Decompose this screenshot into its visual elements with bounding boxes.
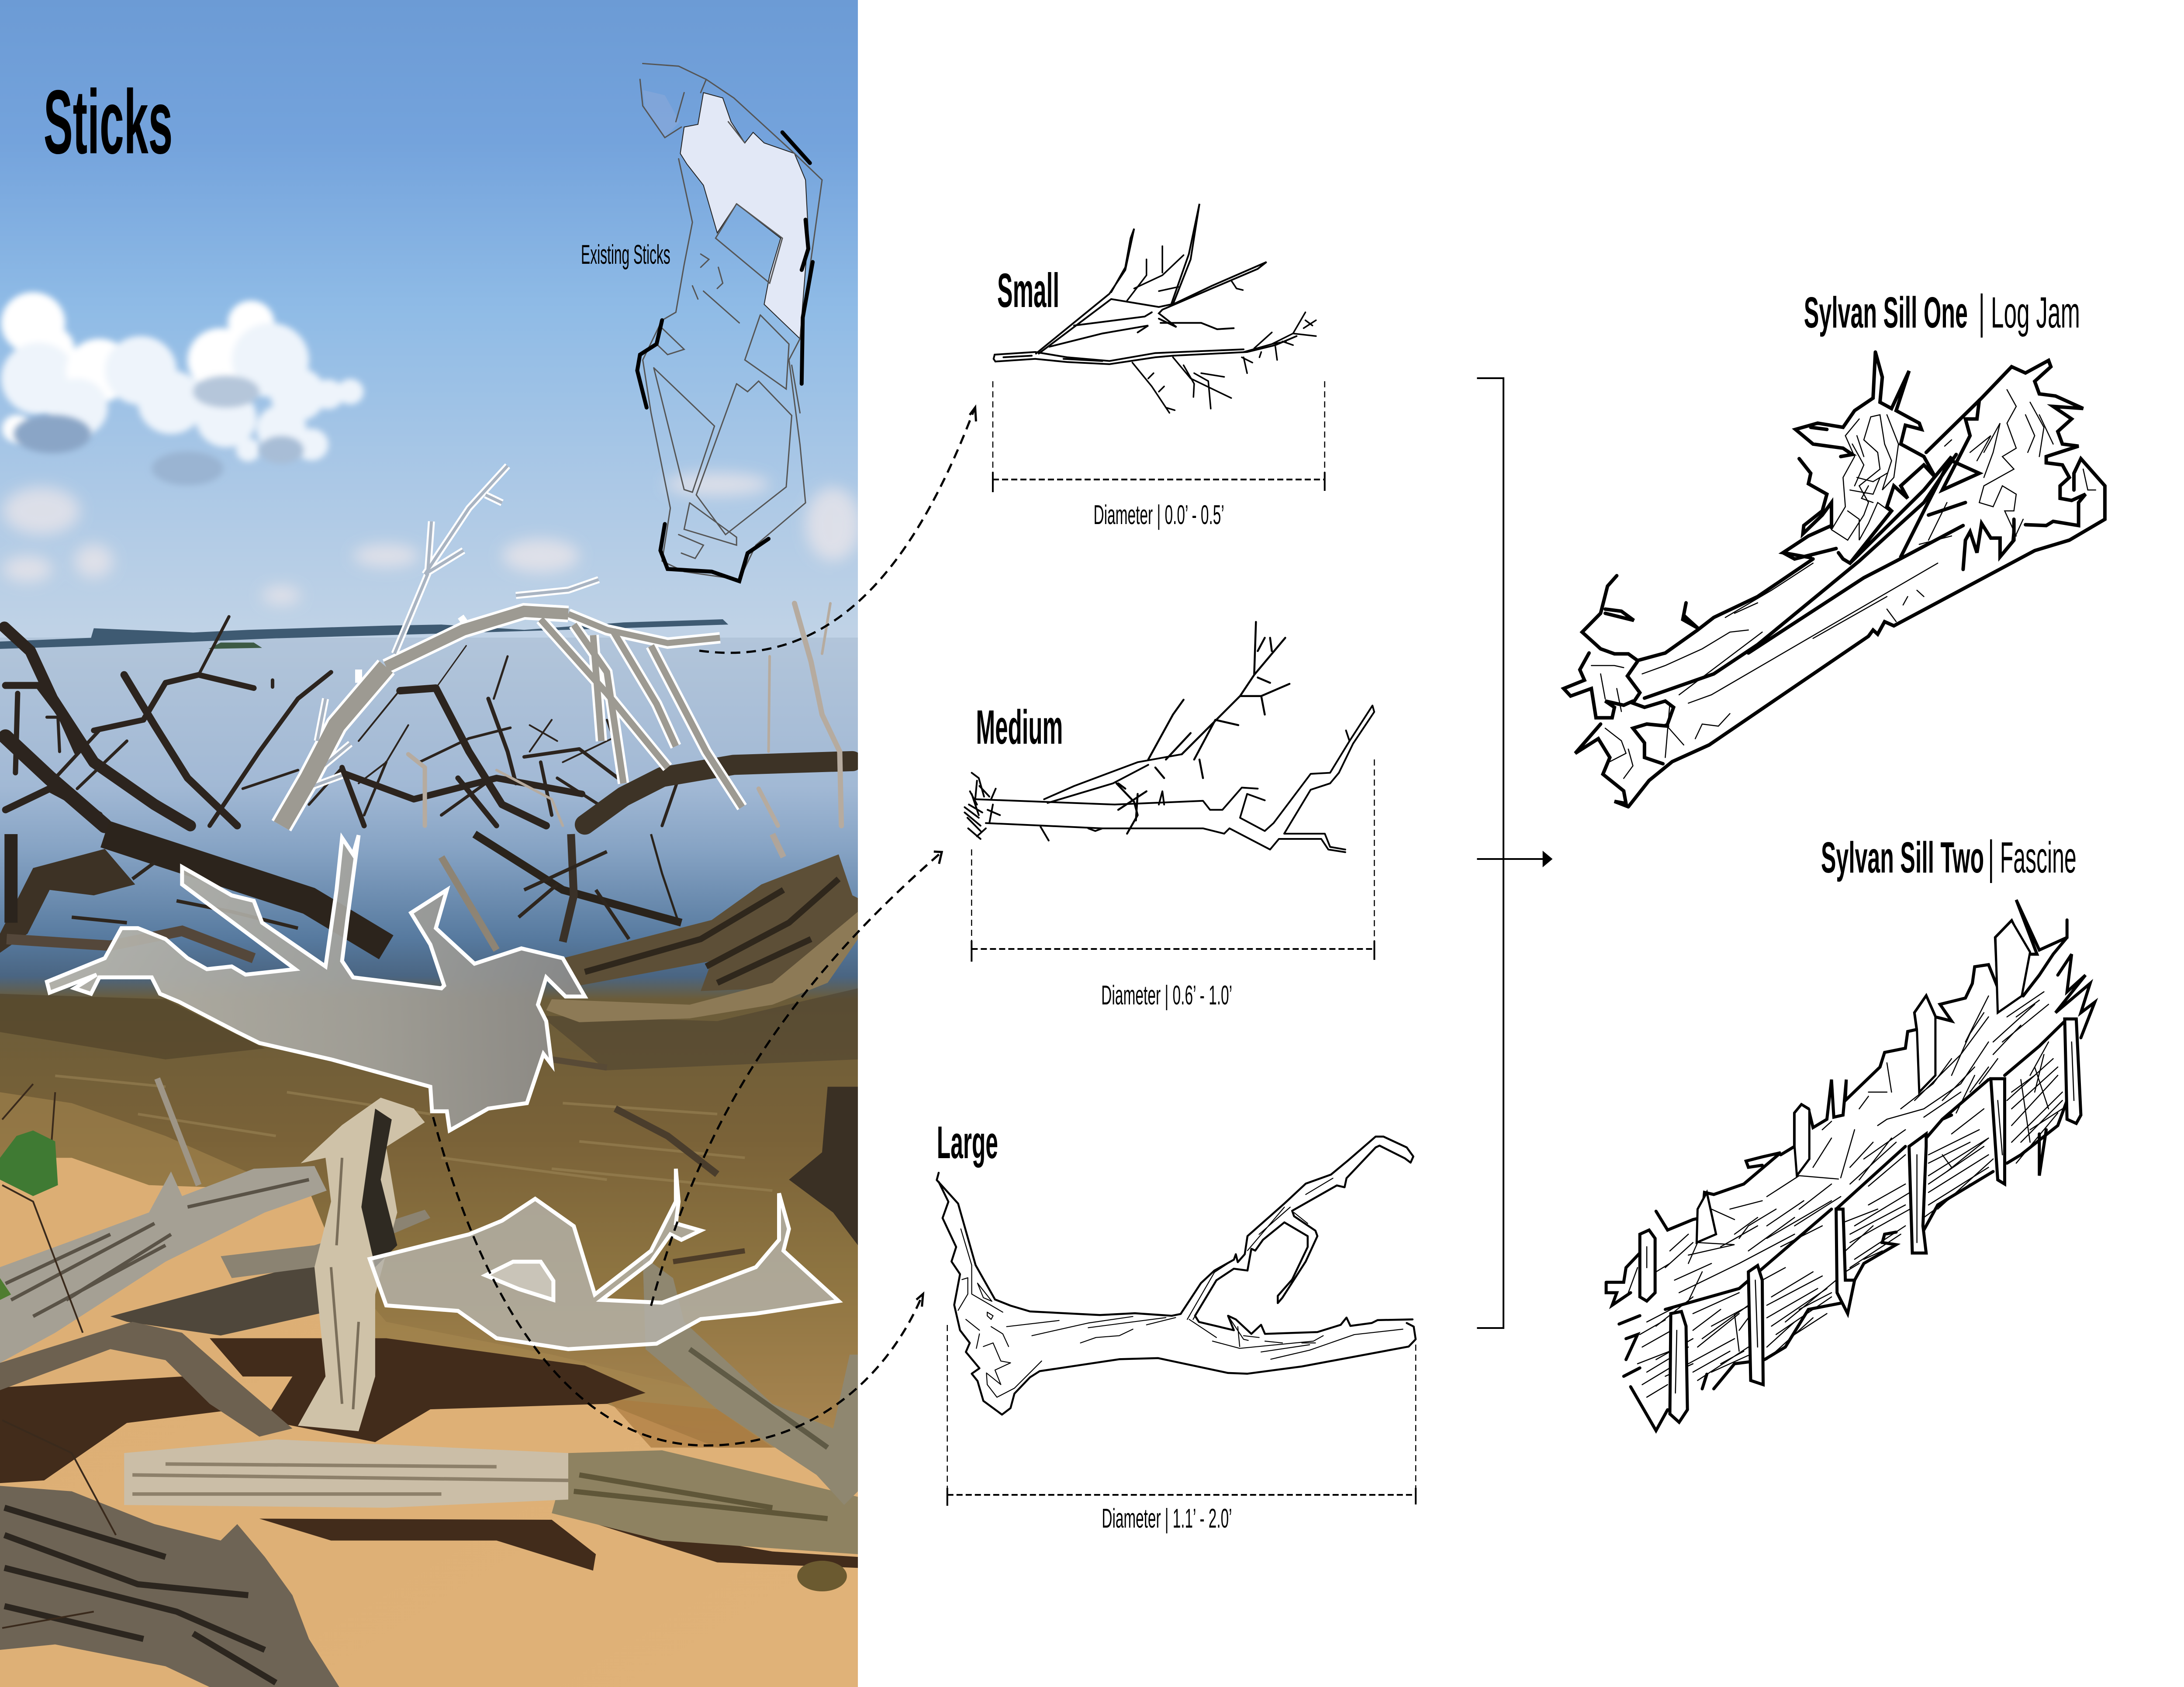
label: Existing Sticks: Existing Sticks [581,239,670,269]
fascine extra hatching [1640,992,2063,1377]
title: Sticks [44,71,173,172]
foliage and twigs [0,1084,847,1628]
background branches over water [4,604,852,826]
label: Large: Large [937,1117,998,1168]
dimension: medium diameter [971,759,1374,962]
fascine hatching [1628,996,2063,1397]
heading: Sylvan Sill Two: Fascine [2000,833,2077,882]
arrow: bracket to sills [1477,851,1552,867]
label: Small: Small [997,264,1059,317]
panel: shoreline photograph [0,0,860,1687]
fascine body outline [1606,900,2095,1431]
driftwood logs and roots in water [0,834,858,1262]
large stick drawing [937,1137,1416,1414]
label: Medium: Medium [976,701,1063,754]
dimension: small diameter [993,381,1325,492]
far shoreline [0,619,728,649]
heading: Sylvan Sill One: Sylvan Sill One [1804,288,1968,337]
driftwood logs on the beach [0,1097,858,1687]
map: site plan with existing sticks [637,63,822,581]
sky [0,0,858,642]
sand beach [0,988,858,1687]
shadows on the sand [0,1338,858,1570]
map: upper lobes [643,90,680,138]
label: large diameter: Diameter | 1.1’ - 2.0’ [1102,1503,1232,1533]
clouds [1,292,860,605]
overlay: highlighted small stick [281,466,742,826]
label: small diameter: Diameter | 0.0’ - 0.5’ [1093,500,1224,530]
map: thick black existing stick segments [637,132,813,581]
medium stick drawing [964,622,1374,852]
map: site outlines [640,63,822,580]
sill two: fascine drawing [1606,900,2095,1431]
water [0,638,858,1485]
dimension: large diameter [947,1325,1416,1506]
fascine stakes [1640,1019,2081,1422]
map: woodland fill [680,93,808,339]
arrow: leader to medium [651,852,942,1306]
bracket [1477,378,1503,1328]
small stick drawing [994,204,1316,413]
overlay: highlighted medium stick [47,835,585,1131]
arrow: leader to small [699,407,976,653]
heading: Sylvan Sill Two: Sylvan Sill Two [1821,833,1984,882]
overlay: highlighted large stick [370,1169,839,1349]
sill one: log jam drawing [1564,352,2105,807]
label: medium diameter: Diameter | 0.6’ - 1.0’ [1101,980,1232,1010]
heading: Sylvan Sill One: Log Jam [1991,288,2080,337]
arrow: leader to large [433,1117,923,1446]
